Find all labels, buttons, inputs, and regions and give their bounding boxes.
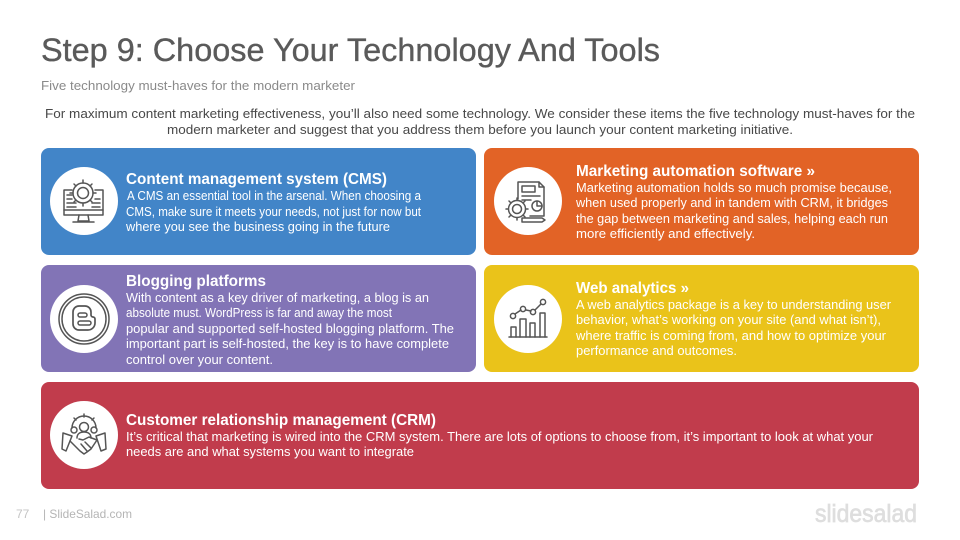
footer source: | SlideSalad.com [43,507,132,521]
heading: Blogging platforms [126,273,266,290]
body text: A CMS an essential tool in the arsenal. When choosing a [127,189,421,203]
page number: 77 [16,507,30,521]
logo wordmark: slidesalad [815,500,917,528]
title: Step 9: Choose Your Technology And Tools [41,32,660,68]
body text: important part is self-hosted, the key is to have complete [126,337,449,351]
body text: It’s critical that marketing is wired into the CRM system. There are lots of options to choose from, it’s important to look at what your [126,430,873,444]
body text [575,298,891,358]
heading: Web analytics » [576,280,689,297]
body text: CMS, make sure it meets your needs, not just for now but [126,205,421,219]
icon: bar chart with trend line [509,299,547,337]
body text: the gap between marketing and sales, helping each run [576,212,888,226]
subtitle: Five technology must-haves for the modern marketer [41,79,355,93]
body text: absolute must. WordPress is far and away the most [126,306,392,320]
body text: Marketing automation holds so much promise because, [576,181,892,195]
body text [575,181,892,241]
body text: more efficiently and effectively. [576,227,755,241]
body text: where you see the business going in the future [125,220,390,234]
panel: web analytics [484,265,919,372]
icon: document with gear [506,182,545,222]
body text [125,189,421,234]
panel: customer relationship management [41,382,919,489]
body text: With content as a key driver of marketing, a blog is an [126,291,429,305]
heading: Customer relationship management (CRM) [126,412,436,429]
body text [126,430,873,459]
icon: blogger logo [59,294,109,344]
intro paragraph [45,106,915,137]
body text: when used properly and in tandem with CRM, it bridges [575,196,888,210]
intro paragraph: For maximum content marketing effectiveness, you’ll also need some technology. We consider these items the five technology must-haves for the [45,106,915,121]
body text [126,291,454,367]
icon: handshake with people and gear [62,414,106,454]
heading: Content management system (CMS) [126,171,387,188]
intro paragraph: modern marketer and suggest that you address them before you launch your content marketing initiative. [167,122,793,137]
panel: content management system [41,148,476,255]
body text: A web analytics package is a key to understanding user [576,298,891,312]
panel: blogging platforms [41,265,476,372]
heading: Marketing automation software » [576,163,815,180]
body text: control over your content. [126,353,273,367]
body text: performance and outcomes. [576,344,737,358]
panel: marketing automation software [484,148,919,255]
body text: behavior, what’s working on your site (and what isn’t), [576,313,881,327]
body text: where traffic is coming from, and how to optimize your [575,329,886,343]
icon: monitor with gear [64,180,103,222]
body text: needs are and what systems you want to integrate [126,445,414,459]
body text: popular and supported self-hosted blogging platform. The [126,322,454,336]
